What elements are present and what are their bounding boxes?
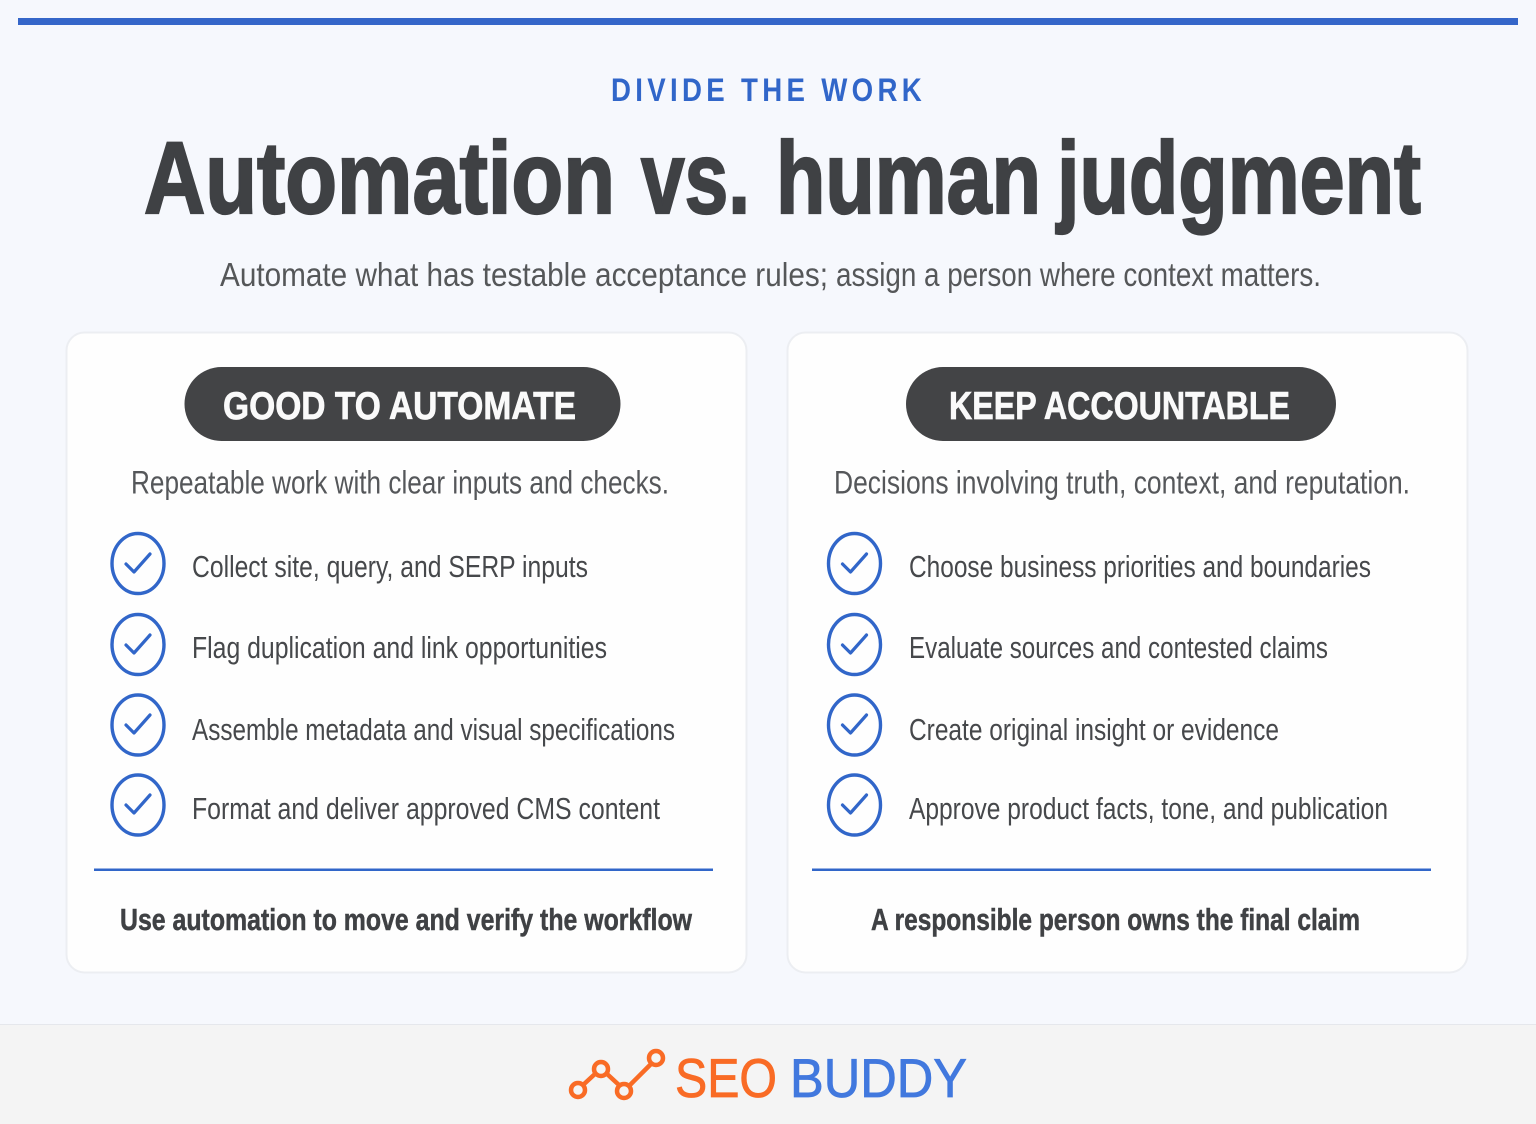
title: vs. — [641, 121, 750, 235]
list item 2 — [828, 614, 1328, 674]
subtitle: assign a person where context matters. — [836, 256, 1321, 293]
subtitle: Automate what has testable acceptance rules; — [220, 256, 828, 293]
title: judgment — [1055, 121, 1421, 235]
title: Automation — [144, 121, 615, 235]
badge: keep accountable: KEEP ACCOUNTABLE — [949, 385, 1290, 428]
logo wordmark — [675, 1047, 967, 1109]
panel background — [788, 332, 1468, 972]
panel: good to automate — [66, 332, 746, 972]
logo wordmark: BUDDY — [790, 1047, 967, 1109]
panel takeaway: Use automation to move and verify the workflow — [120, 902, 693, 937]
list item 1: Collect site, query, and SERP inputs — [192, 549, 588, 584]
icon: logo trend line — [571, 1051, 663, 1098]
list item 1 — [112, 534, 588, 594]
top accent bar — [18, 18, 1518, 25]
badge: good to automate: GOOD TO AUTOMATE — [223, 385, 576, 428]
footer band — [0, 1024, 1536, 1124]
panel description: Repeatable work with clear inputs and checks. — [131, 464, 669, 500]
panel takeaway: A responsible person owns the final claim — [871, 902, 1360, 937]
list item 4: Format and deliver approved CMS content — [192, 791, 660, 826]
list item 3: Create original insight or evidence — [909, 712, 1279, 747]
panel background — [66, 332, 746, 972]
list item 4: Approve product facts, tone, and publication — [909, 791, 1388, 826]
panel: keep accountable — [788, 332, 1468, 972]
title — [144, 121, 1421, 235]
list item 4 — [828, 775, 1388, 835]
list item 3 — [112, 695, 675, 755]
eyebrow: DIVIDE THE WORK — [611, 72, 926, 108]
list item 1: Choose business priorities and boundaries — [909, 549, 1371, 584]
list item 2: Evaluate sources and contested claims — [909, 630, 1328, 665]
panel description: Decisions involving truth, context, and reputation. — [834, 464, 1410, 500]
list item 2 — [112, 614, 607, 674]
logo wordmark: SEO — [675, 1047, 777, 1109]
list item 1 — [828, 534, 1371, 594]
list item 4 — [112, 775, 660, 835]
title: human — [776, 121, 1041, 235]
badge: good to automate — [184, 367, 620, 441]
list item 3 — [828, 695, 1279, 755]
list item 3: Assemble metadata and visual specifications — [192, 712, 675, 747]
list item 2: Flag duplication and link opportunities — [192, 630, 607, 665]
badge: keep accountable — [906, 367, 1336, 441]
subtitle — [220, 256, 1321, 293]
